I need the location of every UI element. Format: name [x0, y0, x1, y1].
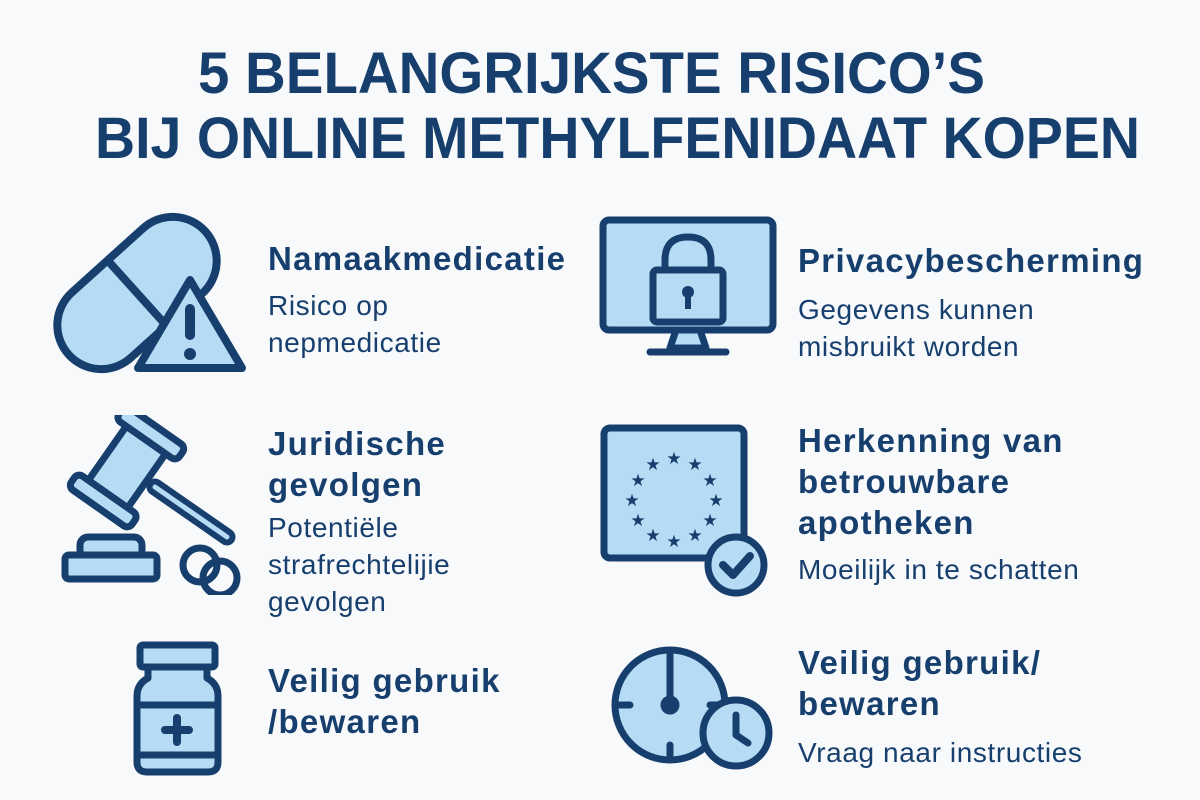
icon: EU stars with check: ★: [630, 511, 646, 531]
text: Veilig gebruik left: Veilig gebruik: [268, 662, 501, 699]
text: Juridische gevolgen: gevolgen: [268, 586, 386, 617]
text: Veilig gebruik left: [268, 662, 501, 740]
text: Herkenning: betrouwbare: [798, 463, 1010, 500]
text: Juridische gevolgen: strafrechtelijie: [268, 549, 450, 580]
icon: clocks: [612, 646, 772, 770]
text: Herkenning: [798, 422, 1079, 585]
text: Privacybescherming: misbruikt worden: [798, 331, 1019, 362]
text: Namaakmedicatie: Namaakmedicatie: [268, 240, 566, 277]
icon: monitor lock: [600, 216, 776, 356]
text: Herkenning: Herkenning van: [798, 422, 1064, 459]
text: Privacybescherming: Privacybescherming: [798, 242, 1144, 279]
icon: EU stars with check: ★: [630, 471, 646, 491]
text: Privacybescherming: [798, 242, 1144, 362]
icon: EU stars with check: ★: [624, 491, 640, 511]
icon: EU stars with check: ★: [666, 449, 682, 469]
text: Juridische gevolgen: [268, 425, 450, 617]
text: Privacybescherming: Gegevens kunnen: [798, 294, 1034, 325]
text: Juridische gevolgen: Juridische: [268, 425, 446, 462]
text: Veilig gebruik right: Vraag naar instructies: [798, 737, 1083, 768]
icon: pill with warning: [53, 212, 246, 374]
icon: EU stars with check: ★: [702, 471, 718, 491]
icon: EU stars with check: ★: [645, 455, 661, 475]
text: Veilig gebruik right: [798, 644, 1083, 768]
icon: EU stars with check: ★: [708, 491, 724, 511]
icon: EU stars with check: ★: [687, 455, 703, 475]
text: Namaakmedicatie: nepmedicatie: [268, 327, 442, 358]
text: Juridische gevolgen: gevolgen: [268, 466, 423, 503]
title: BIJ ONLINE METHYLFENIDAAT KOPEN: [95, 106, 1140, 171]
text: Herkenning: apotheken: [798, 504, 975, 541]
icon: EU stars with check: ★: [645, 526, 661, 546]
icon: EU stars with check: ★: [702, 511, 718, 531]
text: Namaakmedicatie: [268, 240, 566, 358]
text: Veilig gebruik left: /bewaren: [268, 703, 421, 740]
text: Veilig gebruik right: Veilig gebruik/: [798, 644, 1041, 681]
icon: gavel: [62, 415, 240, 595]
text: Juridische gevolgen: Potentiële: [268, 512, 399, 543]
text: Veilig gebruik right: bewaren: [798, 685, 941, 722]
icon: EU stars with check: ★: [687, 526, 703, 546]
title: 5 BELANGRIJKSTE RISICO’S: [198, 41, 985, 106]
icon: EU stars with check: ★: [666, 532, 682, 552]
text: Namaakmedicatie: Risico op: [268, 290, 389, 321]
icon: EU stars with check: [600, 424, 768, 596]
icon: medicine jar: [134, 642, 222, 776]
title: [95, 41, 1140, 171]
text: Herkenning: Moeilijk in te schatten: [798, 554, 1079, 585]
